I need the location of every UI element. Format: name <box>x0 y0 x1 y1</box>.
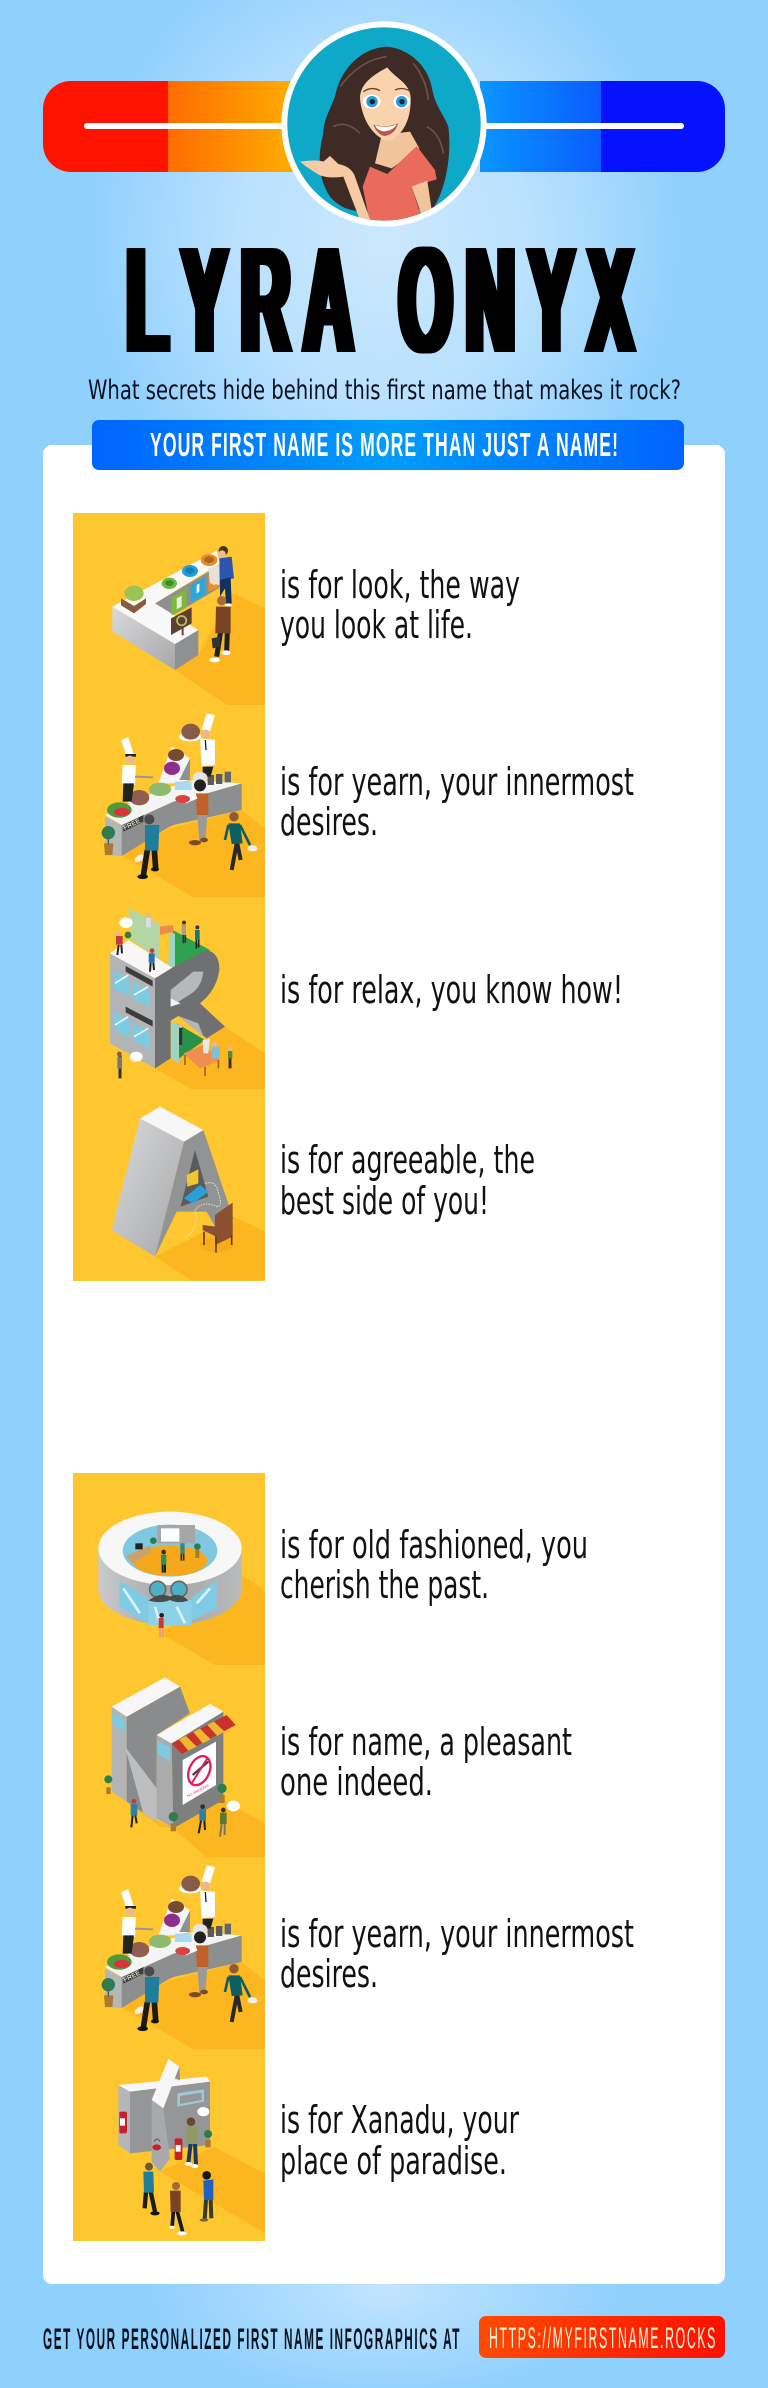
header bar right <box>480 81 725 172</box>
yellow column bottom <box>73 1473 265 2241</box>
illustration: letter A <box>112 1107 265 1281</box>
header white line <box>84 123 684 129</box>
illustration: letter O eyewear shop <box>98 1512 265 1665</box>
text: O <box>280 1523 588 1607</box>
text: X: is for Xanadu, your <box>280 2098 519 2142</box>
yellow column top <box>73 513 265 1281</box>
footer url button <box>479 2316 725 2358</box>
text: L <box>280 563 520 647</box>
text: N: is for name, a pleasant <box>280 1720 572 1764</box>
illustration: letter Y buffet (repeat) <box>102 1865 265 2049</box>
text: Y <box>280 760 634 844</box>
header bar left <box>43 81 293 172</box>
text: A: is for agreeable, the <box>280 1138 535 1182</box>
text: X: place of paradise. <box>280 2139 507 2183</box>
illustration: letter L recycling counter <box>112 546 265 705</box>
illustration: letter N storefront <box>104 1677 265 1857</box>
illustration: letter Y buffet: FREE <box>122 817 142 832</box>
text: O: cherish the past. <box>280 1563 489 1607</box>
text: L: is for look, the way <box>280 563 520 607</box>
title: LYRA ONYX <box>122 215 642 384</box>
illustration: letter N storefront: NO SMOKING <box>187 1783 210 1798</box>
text: Y: desires. <box>280 800 378 844</box>
text: A: best side of you! <box>280 1179 489 1223</box>
illustration: letter R building <box>110 908 265 1089</box>
text: N: one indeed. <box>280 1760 433 1804</box>
main content panel <box>43 445 725 2284</box>
illustration: letter X <box>118 2059 265 2235</box>
avatar portrait <box>281 21 487 227</box>
text: N <box>280 1720 572 1804</box>
banner <box>92 420 684 470</box>
text: O: is for old fashioned, you <box>280 1523 588 1567</box>
text: A <box>280 1138 535 1223</box>
text: L: you look at life. <box>280 603 473 647</box>
illustration: letter Y buffet (repeat): FREE <box>122 1969 142 1984</box>
text: X <box>280 2098 519 2183</box>
illustration: letter Y buffet <box>102 713 265 897</box>
text: Y repeat <box>280 1912 634 1996</box>
text: Y repeat: desires. <box>280 1952 378 1996</box>
